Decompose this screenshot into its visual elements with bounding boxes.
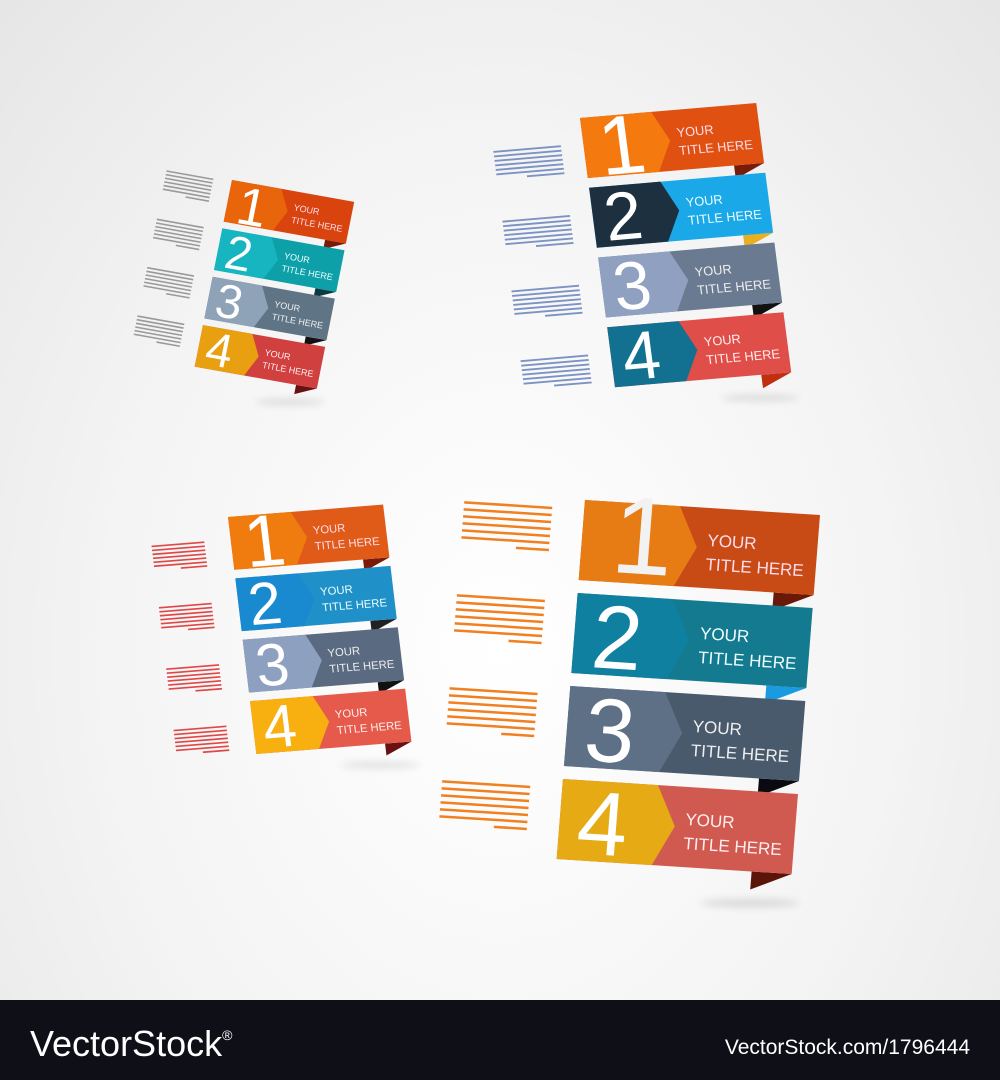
step 4: 4: [201, 323, 238, 379]
step 3: YOUR: [694, 261, 733, 279]
step 2: 2: [588, 586, 646, 690]
step 4: [249, 682, 413, 766]
step 2: [212, 225, 345, 301]
step 1: TITLE HERE: [705, 555, 804, 580]
step 3: YOUR: [692, 717, 743, 739]
step 3: 3: [252, 630, 293, 699]
step 4: TITLE HERE: [705, 346, 781, 367]
footer url: VectorStock.com/1796444: [725, 1036, 970, 1059]
step 2: 2: [245, 569, 286, 638]
step 3: TITLE HERE: [696, 276, 772, 297]
step 1: TITLE HERE: [290, 215, 343, 234]
step 1: YOUR: [707, 531, 757, 553]
shadows: [255, 395, 800, 907]
group 1: small steps: [128, 163, 355, 398]
step 2: [235, 560, 398, 643]
step 1: [578, 87, 766, 194]
step 3: TITLE HERE: [271, 312, 324, 331]
step 4: YOUR: [264, 348, 292, 362]
step 2: YOUR: [320, 584, 353, 598]
step 1: 1: [593, 97, 651, 193]
step 3: 3: [581, 679, 639, 783]
step 2: 2: [220, 226, 257, 283]
step 4: YOUR: [685, 810, 735, 832]
step 1: YOUR: [676, 122, 714, 140]
step 2: [588, 167, 775, 261]
step 4: 4: [574, 772, 632, 876]
step 2: YOUR: [685, 192, 724, 210]
step 3: TITLE HERE: [690, 741, 790, 766]
step 2: TITLE HERE: [697, 648, 797, 673]
step 4: TITLE HERE: [261, 360, 314, 379]
step 3: YOUR: [327, 645, 361, 660]
step 4: YOUR: [703, 331, 742, 349]
step 1: YOUR: [293, 202, 321, 217]
step 3: 3: [609, 248, 656, 325]
step 1: [222, 174, 355, 254]
step 4: [555, 771, 799, 892]
footer bar: [0, 1000, 1000, 1080]
step 4: 4: [618, 317, 665, 395]
step 1: 1: [240, 500, 290, 583]
step 4: TITLE HERE: [336, 720, 403, 737]
step 1: TITLE HERE: [314, 536, 381, 553]
step 3: YOUR: [274, 299, 301, 314]
group 3: bottom-left steps: [147, 491, 413, 772]
text lines group 4: [439, 502, 552, 829]
step 2: TITLE HERE: [322, 597, 388, 614]
step 3: [597, 237, 784, 331]
step 3: [242, 621, 406, 704]
step 3: TITLE HERE: [329, 659, 396, 676]
step 3: [202, 273, 336, 350]
step 1: 1: [608, 473, 678, 600]
step 4: YOUR: [334, 707, 368, 721]
text lines group 2: [493, 146, 592, 388]
step 3: 3: [211, 274, 247, 331]
step 2: YOUR: [283, 251, 311, 265]
group 2: top-right steps: [488, 87, 793, 408]
step 3: [563, 678, 806, 799]
step 2: TITLE HERE: [281, 263, 334, 282]
step 2: 2: [600, 178, 647, 256]
footer logo: VectorStock: [30, 1023, 222, 1064]
text lines group 3: [152, 542, 229, 754]
step 4: TITLE HERE: [683, 834, 782, 859]
step 4: [193, 321, 326, 398]
step 2: YOUR: [699, 624, 750, 646]
text lines group 1: [133, 171, 213, 346]
step 1: [577, 471, 822, 613]
step 1: [226, 491, 391, 584]
step 4: 4: [259, 691, 300, 761]
step 1: YOUR: [312, 523, 346, 537]
step 4: [606, 307, 793, 401]
footer logo: ®: [222, 1027, 233, 1043]
step 2: [570, 585, 813, 706]
step 2: TITLE HERE: [687, 207, 763, 228]
step 1: 1: [232, 176, 272, 239]
group 4: large steps: [435, 464, 822, 892]
step 1: TITLE HERE: [678, 137, 754, 158]
